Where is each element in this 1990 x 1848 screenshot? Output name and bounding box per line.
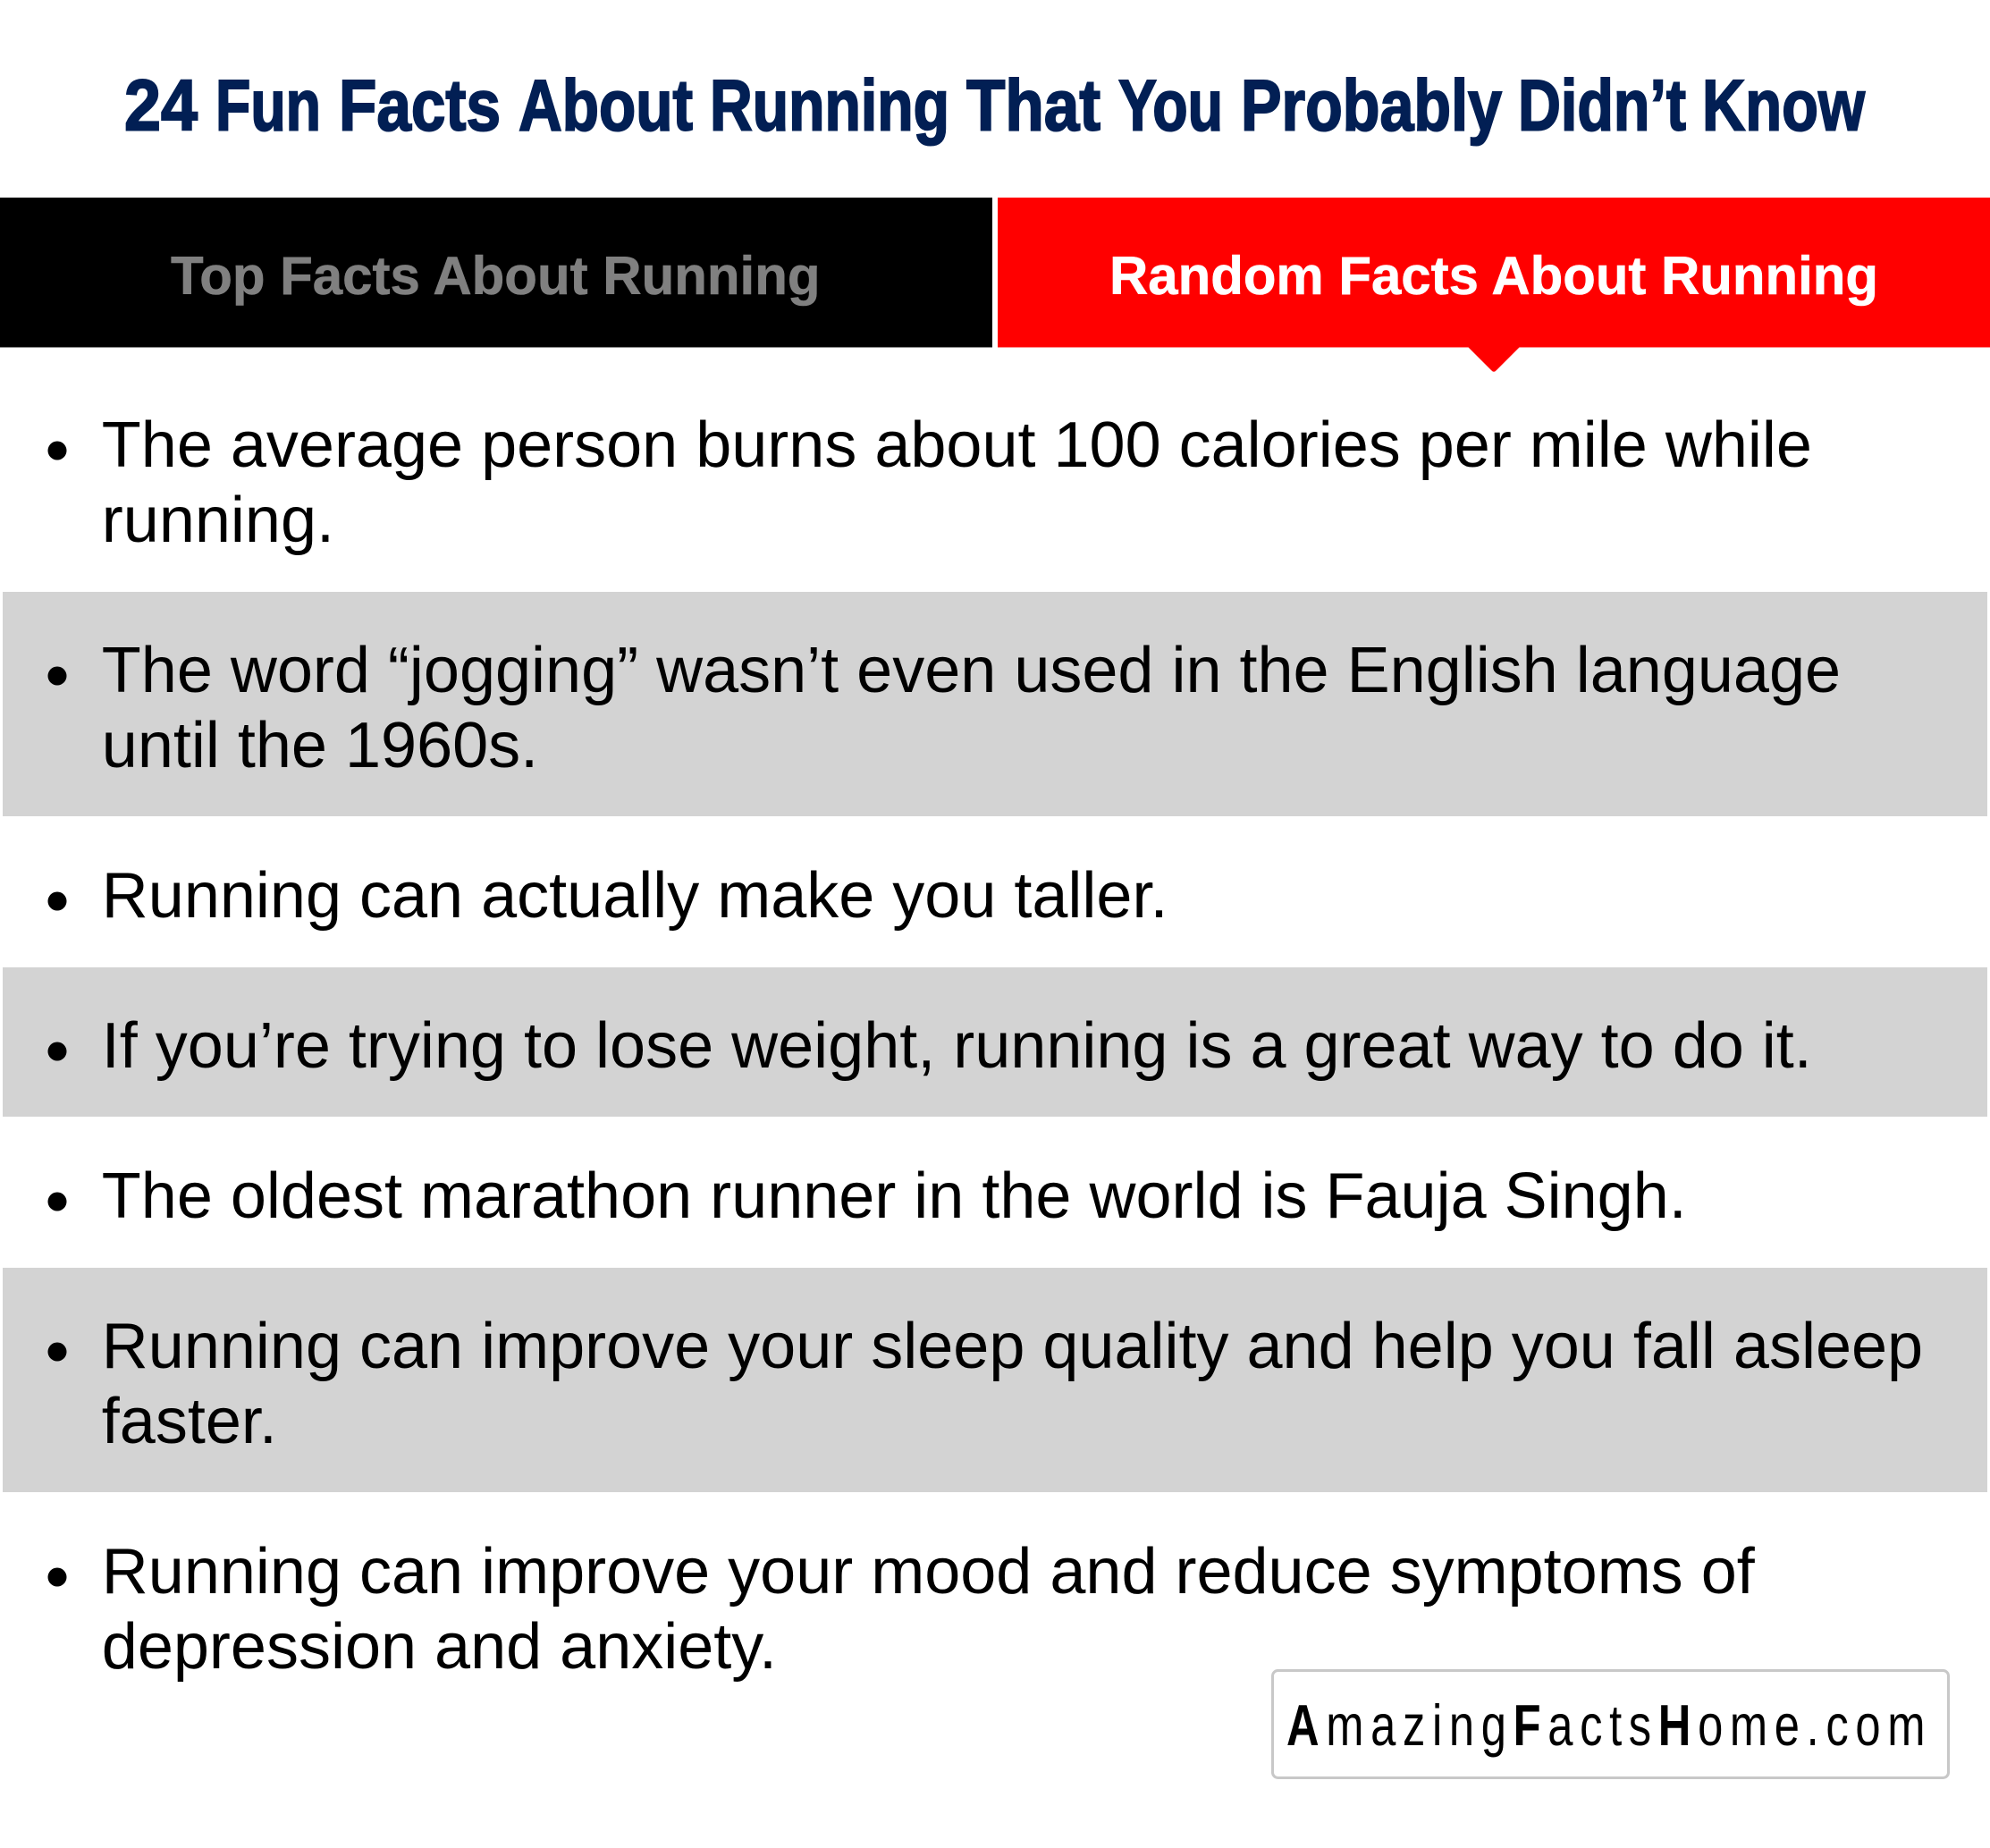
fact row 1: running.: [102, 485, 334, 556]
fact row 6: [3, 1268, 1987, 1492]
fact row 1: [48, 409, 1812, 556]
watermark badge: AmazingFactsHome.com: [1286, 1693, 1925, 1758]
title: That: [966, 66, 1100, 147]
fact row 3: Running can actually make you taller.: [102, 860, 1168, 932]
fact row 7: Running can improve your mood and reduce symptoms of: [102, 1536, 1756, 1608]
fact row 4: [3, 967, 1987, 1117]
fact row 2: [3, 592, 1987, 816]
title: Running: [710, 66, 949, 147]
title: Know: [1702, 66, 1866, 147]
fact row 1: The average person burns about 100 calories per mile while: [102, 409, 1812, 481]
fact row 6: Running can improve your sleep quality and help you fall asleep: [102, 1311, 1923, 1382]
tab: top facts: Top Facts About Running: [171, 246, 821, 306]
title: Didn’t: [1518, 66, 1686, 147]
tab: top facts: [0, 198, 992, 347]
tab: random facts (active): Random Facts About Running: [1109, 246, 1878, 306]
fact row 7: [48, 1536, 1756, 1683]
title: Probably: [1241, 66, 1502, 147]
fact row 7: depression and anxiety.: [102, 1611, 777, 1683]
fact row 2: The word “jogging” wasn’t even used in the English language: [102, 635, 1841, 706]
title: Fun: [215, 66, 321, 147]
watermark badge: [1273, 1670, 1949, 1777]
fact row 5: The oldest marathon runner in the world is Fauja Singh.: [102, 1160, 1687, 1232]
fact row 4: If you’re trying to lose weight, running is a great way to do it.: [102, 1010, 1812, 1082]
title: You: [1118, 66, 1223, 147]
fact row 2: until the 1960s.: [102, 710, 538, 781]
title: 24: [124, 66, 198, 147]
fact row 6: faster.: [102, 1386, 277, 1457]
title: About: [519, 66, 693, 147]
tab: random facts (active): [998, 198, 1990, 372]
title: [124, 66, 1866, 147]
title: Facts: [339, 66, 501, 147]
